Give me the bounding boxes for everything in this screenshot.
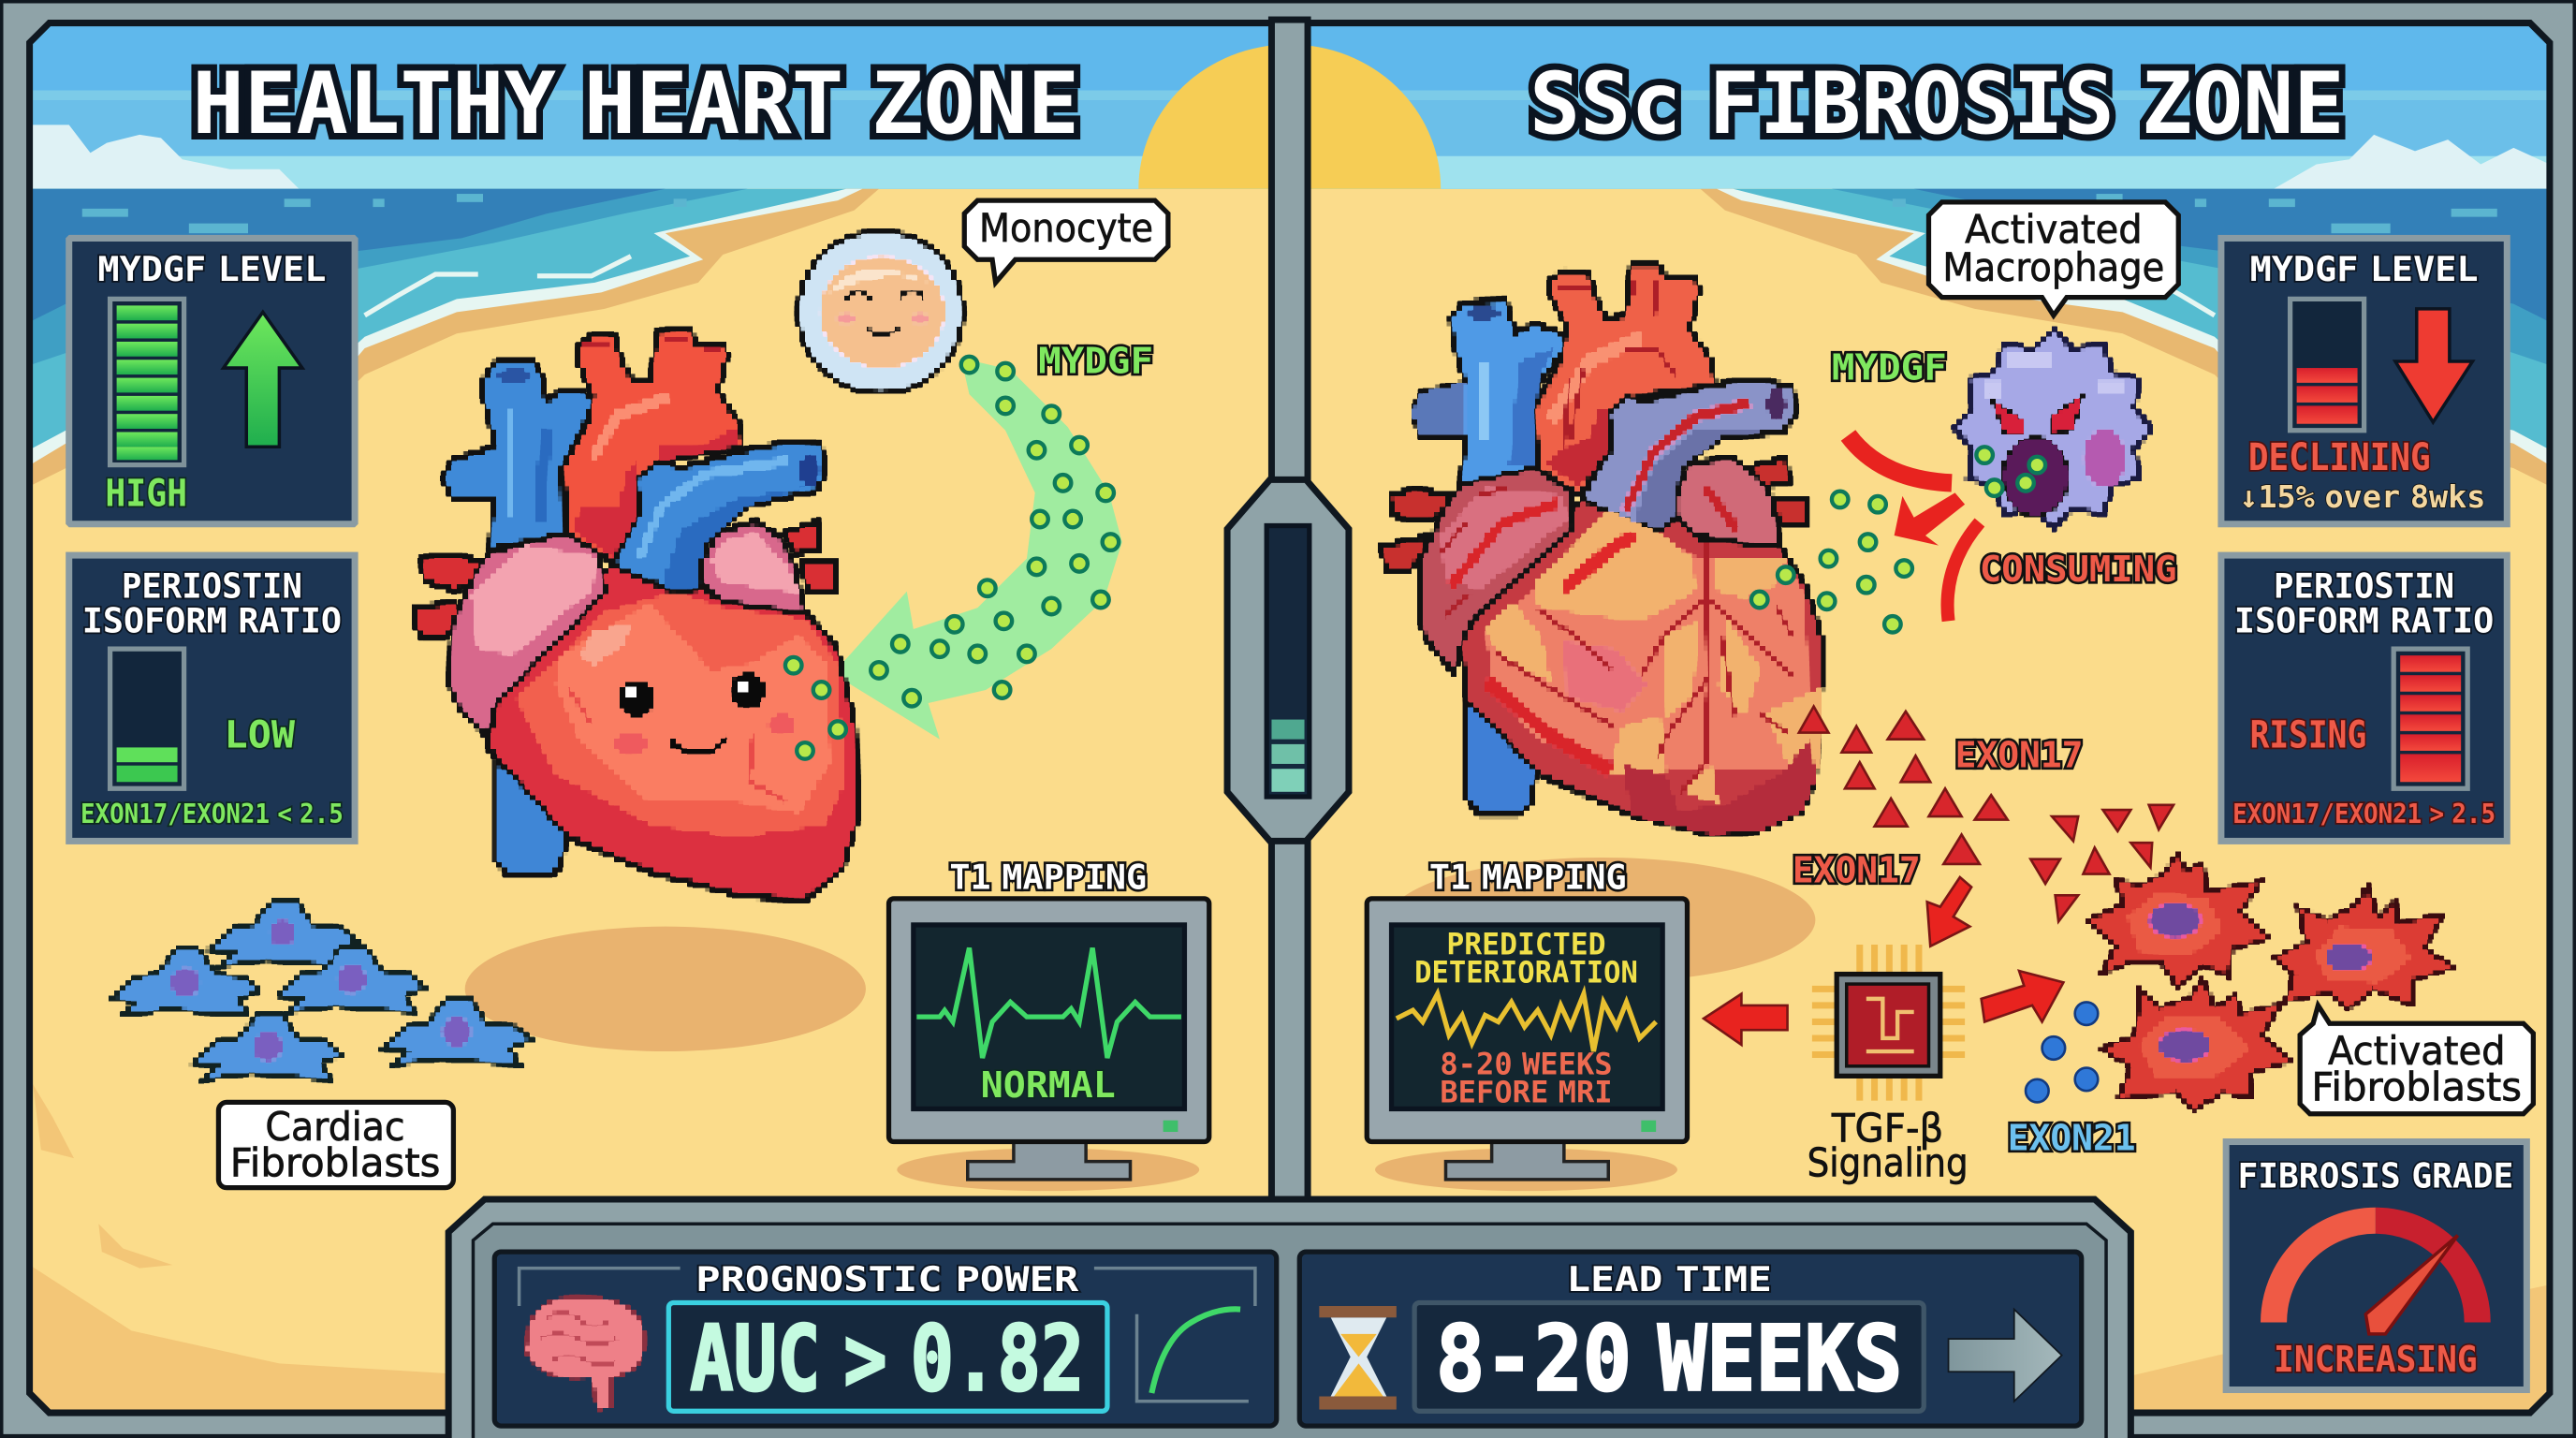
panel: periostin ratio fibrosis: PERIOSTIN [2274, 566, 2454, 607]
right atrium [1676, 458, 1779, 547]
arrow: lead time [1949, 1310, 2062, 1401]
label: Activated Fibroblasts: Activated [2328, 1028, 2506, 1074]
arrow: exon17 to chip [1927, 877, 1971, 946]
label: EXON21: EXON21 [2008, 1117, 2136, 1159]
icon: up arrow [224, 312, 302, 447]
left atrium [1418, 468, 1573, 673]
monitor fibrosis [1367, 899, 1687, 1180]
label: TGF-beta signaling [1808, 1106, 1969, 1185]
label: MYDGF fibrosis: MYDGF [1832, 346, 1947, 389]
label: consuming: CONSUMING [1980, 549, 2177, 591]
sand shadow left [30, 1084, 446, 1416]
label: Cardiac Fibroblasts: Fibroblasts [230, 1139, 440, 1185]
fibroblast cell 2 [2276, 886, 2453, 1008]
panel: periostin ratio fibrosis: RISING [2250, 712, 2366, 756]
ECG trace [916, 947, 1181, 1058]
title right: SSc FIBROSIS ZONE [1530, 53, 2345, 154]
smiling face [613, 672, 796, 756]
ventricle body [1460, 499, 1822, 834]
monitor healthy: NORMAL [981, 1064, 1116, 1107]
panel: periostin ratio healthy [69, 555, 355, 841]
label: T1 mapping fibrosis: T1 MAPPING [1429, 857, 1627, 897]
label: Cardiac Fibroblasts: Cardiac [265, 1104, 405, 1150]
superior vena cava [443, 362, 594, 550]
label: TGF-beta signaling: Signaling [1808, 1139, 1969, 1185]
label: Activated Fibroblasts: Fibroblasts [2311, 1064, 2522, 1110]
fibrosis patches [1486, 511, 1822, 802]
sea right [1701, 189, 2563, 492]
monitor fibrosis: DETERIORATION [1414, 956, 1638, 990]
panel: MYDGF level healthy: HIGH [105, 471, 187, 515]
panel: periostin ratio healthy: LOW [225, 712, 296, 756]
label: Cardiac Fibroblasts [218, 1102, 453, 1188]
sand patch right [1388, 858, 1815, 982]
AUC readout: AUC > 0.82 [690, 1306, 1084, 1411]
monitor fibrosis: BEFORE MRI [1440, 1076, 1613, 1109]
title left: HEALTHY HEART ZONE [192, 53, 1079, 154]
panel: fibrosis grade: FIBROSIS GRADE [2237, 1156, 2513, 1196]
panel: MYDGF level fibrosis: MYDGF LEVEL [2250, 249, 2479, 289]
label: Activated Macrophage: Macrophage [1942, 244, 2164, 290]
icon: TGF-beta chip [1812, 945, 1965, 1101]
exon21 particles [2026, 1002, 2098, 1102]
pulmonary veins left [415, 555, 480, 636]
panel: periostin ratio healthy: EXON17/EXON21 < 2.5 [80, 799, 344, 829]
right atrium [702, 521, 805, 612]
fibroblast cell 3 [2102, 980, 2291, 1109]
fibrotic veins [1496, 543, 1793, 795]
pulmonary veins [1382, 458, 1806, 570]
pulmonary veins right [784, 521, 837, 591]
sky [17, 17, 2563, 189]
lead time readout: 8-20 WEEKS [1436, 1306, 1902, 1411]
panel: MYDGF level fibrosis: ↓15% over 8wks [2239, 478, 2485, 515]
label: Monocyte [964, 200, 1168, 283]
fibrotic heart [1382, 265, 1822, 834]
arrow: chip to monitor [1704, 994, 1788, 1045]
monitor fibrosis: PREDICTED [1446, 928, 1606, 961]
label: Activated Macrophage: Activated [1965, 207, 2143, 253]
label: TGF-beta signaling: TGF-β [1831, 1106, 1943, 1152]
exon17 triangles [1799, 707, 2174, 921]
monocyte cell [798, 231, 962, 392]
pulmonary artery [615, 443, 826, 593]
panel: lead time [1299, 1252, 2082, 1426]
MYDGF stream arrow [833, 359, 1122, 740]
panel: prognostic power: PROGNOSTIC POWER [695, 1259, 1079, 1299]
gauge [2274, 1221, 2478, 1323]
monitor shadows [897, 1149, 1677, 1191]
activated fibroblasts [2087, 855, 2453, 1109]
aorta [564, 329, 742, 561]
MYDGF particles healthy [785, 357, 1119, 759]
panel: periostin ratio fibrosis [2221, 555, 2507, 841]
label: Activated Fibroblasts [2300, 1005, 2533, 1114]
label: T1 mapping healthy: T1 MAPPING [949, 857, 1147, 897]
cardiac fibroblasts [111, 901, 531, 1079]
sea left [17, 189, 879, 492]
ventricle body [487, 565, 858, 900]
label: EXON17 lower: EXON17 [1793, 849, 1921, 891]
panel: periostin ratio fibrosis: EXON17/EXON21 > 2.5 [2232, 799, 2496, 829]
sun [1138, 44, 1441, 189]
panel: fibrosis grade: INCREASING [2274, 1339, 2478, 1381]
panel: prognostic power [494, 1252, 1277, 1426]
sand patch left [465, 927, 866, 1051]
icon: brain [526, 1298, 644, 1410]
aorta [1534, 265, 1715, 495]
consuming arrows [1848, 435, 1980, 621]
monitor fibrosis: 8-20 WEEKS [1440, 1049, 1613, 1082]
inferior vena cava [1467, 697, 1536, 814]
waveform [1397, 994, 1656, 1051]
panel: fibrosis grade [2226, 1142, 2526, 1389]
superior vena cava [1412, 301, 1563, 488]
centre capsule gauge [1227, 479, 1349, 841]
label: Monocyte: Monocyte [979, 205, 1153, 251]
panel: lead time: LEAD TIME [1566, 1259, 1772, 1299]
panel: MYDGF level fibrosis: DECLINING [2248, 435, 2431, 479]
label: MYDGF: MYDGF [1038, 340, 1153, 382]
clouds left [30, 125, 299, 189]
pulmonary artery [1583, 379, 1795, 531]
arrow: chip to fibroblasts [1982, 971, 2063, 1021]
healthy heart [415, 329, 858, 900]
fibroblast cell 1 [2087, 855, 2269, 986]
inferior vena cava [496, 762, 568, 876]
icon: hourglass [1319, 1306, 1397, 1410]
panel: MYDGF level healthy: MYDGF LEVEL [97, 249, 326, 289]
monitor healthy [889, 899, 1209, 1180]
centre divider [1271, 20, 1308, 1215]
bottom console [448, 1199, 2130, 1438]
panel: periostin ratio fibrosis: ISOFORM RATIO [2234, 601, 2494, 641]
left atrium [449, 534, 606, 736]
panel: periostin ratio healthy: PERIOSTIN [122, 566, 302, 607]
panel: periostin ratio healthy: ISOFORM RATIO [82, 601, 342, 641]
macrophage cell [1955, 330, 2152, 527]
panel: MYDGF level fibrosis [2221, 238, 2507, 524]
label: Activated Macrophage [1928, 202, 2178, 315]
panel: MYDGF level healthy [69, 238, 355, 524]
sand shadow right [2128, 1284, 2550, 1416]
label: EXON17 upper: EXON17 [1955, 734, 2083, 776]
clouds right [2274, 135, 2550, 189]
MYDGF particles fibrosis [1751, 447, 2045, 633]
ROC chart [1137, 1309, 1249, 1401]
icon: down arrow [2395, 309, 2472, 422]
